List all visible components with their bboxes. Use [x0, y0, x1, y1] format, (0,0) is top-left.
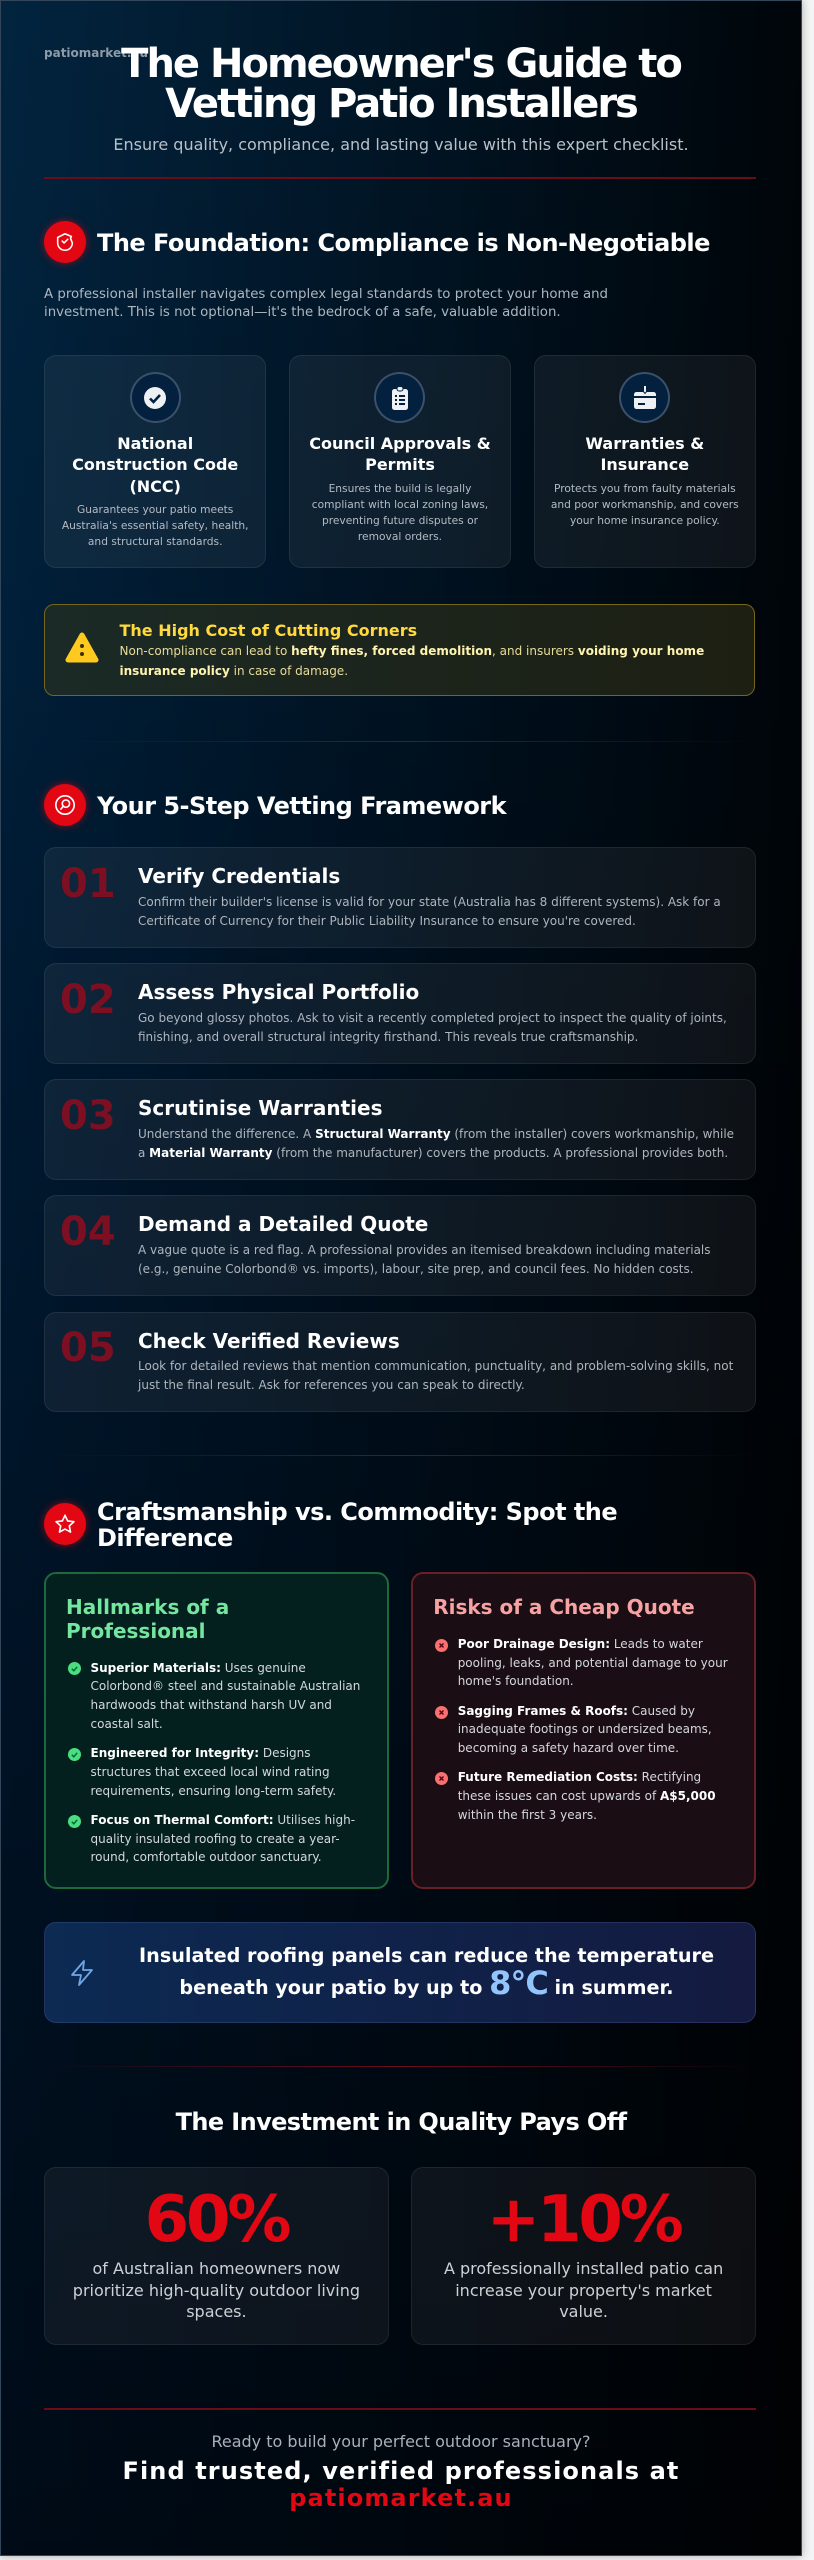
list item: Future Remediation Costs: Rectifying [458, 1770, 701, 1784]
step title: Demand a Detailed Quote [138, 1212, 428, 1236]
card text [312, 482, 488, 543]
stat text: spaces. [186, 2302, 247, 2321]
heading: craftsmanship [97, 1498, 617, 1552]
step title: Assess Physical Portfolio [138, 980, 419, 1004]
card title: (NCC) [129, 477, 181, 496]
stat text: A professionally installed patio can [444, 2259, 723, 2278]
title: Vetting Patio Installers [165, 81, 637, 127]
intro paragraph: A professional installer navigates complex legal standards to protect your home and [44, 287, 608, 302]
callout text: Non-compliance can lead to hefty fines, forced demolition, and insurers voiding your home [120, 644, 704, 658]
step text: A vague quote is a red flag. A professional provides an itemised breakdown including materials [138, 1243, 711, 1257]
step text: Look for detailed reviews that mention communication, punctuality, and problem-solving skills, not [138, 1359, 733, 1373]
card text: compliant with local zoning laws, [312, 498, 488, 511]
icon: id badge [619, 372, 670, 423]
list item: within the first 3 years. [458, 1808, 597, 1822]
list item [90, 1813, 355, 1864]
list item [90, 1746, 336, 1798]
step number: 04 [60, 1209, 116, 1255]
list item: pooling, leaks, and potential damage to your [458, 1656, 728, 1670]
list item: hardwoods that withstand harsh UV and [90, 1698, 332, 1712]
callout: insulated roofing [44, 1922, 756, 2023]
panel: risks of a cheap quote [411, 1572, 756, 1889]
step text: a Material Warranty (from the manufacturer) covers the products. A professional provides both. [138, 1146, 728, 1160]
list item: requirements, ensuring long-term safety. [90, 1784, 336, 1798]
step text [138, 1127, 734, 1160]
step number: 03 [60, 1093, 116, 1139]
step text [138, 1243, 711, 1276]
panel title: Professional [66, 1619, 206, 1643]
step 3 [44, 1079, 756, 1180]
list item: structures that exceed local wind rating [90, 1765, 330, 1779]
list item: Poor Drainage Design: Leads to water [458, 1637, 703, 1651]
intro paragraph: investment. This is not optional—it's the bedrock of a safe, valuable addition. [44, 305, 561, 320]
step text [138, 895, 721, 928]
card text: and structural standards. [88, 535, 222, 548]
card title [72, 434, 238, 496]
stat text [73, 2259, 360, 2321]
step text: Confirm their builder's license is valid for your state (Australia has 8 different systems). Ask for a [138, 895, 721, 909]
list item: Sagging Frames & Roofs: Caused by [458, 1704, 695, 1718]
card text: Guarantees your patio meets [77, 503, 233, 516]
card text: Protects you from faulty materials [554, 482, 736, 495]
subtitle: Ensure quality, compliance, and lasting value with this expert checklist. [113, 135, 689, 154]
list item: coastal salt. [90, 1717, 163, 1731]
card title: National [117, 434, 193, 453]
heading: craftsmanship: Difference [97, 1524, 233, 1552]
step text: finishing, and overall structural integrity firsthand. This reveals true craftsmanship. [138, 1030, 638, 1044]
icon: cross [435, 1772, 448, 1785]
step text: (e.g., genuine Colorbond® vs. imports), labour, site prep, and council fees. No hidden costs. [138, 1262, 694, 1276]
card text: your home insurance policy. [570, 514, 720, 527]
step number: 02 [60, 977, 116, 1023]
callout text: beneath your patio by up to 8°C in summer. [179, 1964, 674, 2002]
list item: Colorbond® steel and sustainable Australian [90, 1679, 360, 1693]
list item: these issues can cost upwards of A$5,000 [458, 1789, 716, 1803]
step number: 05 [60, 1325, 116, 1371]
panel: hallmarks of a professional [44, 1572, 389, 1889]
panel title [66, 1595, 229, 1643]
card text: removal orders. [358, 530, 442, 543]
card title: Permits [365, 455, 435, 474]
panel: council approvals [289, 355, 511, 568]
step title: Verify Credentials [138, 864, 340, 888]
step text [138, 1359, 734, 1392]
step text: Go beyond glossy photos. Ask to visit a recently completed project to inspect the quality of joints, [138, 1011, 727, 1025]
list item: round, comfortable outdoor sanctuary. [90, 1850, 322, 1864]
icon: clipboard [374, 372, 425, 423]
card title: Council Approvals & [309, 434, 491, 453]
list item [90, 1661, 360, 1731]
heading: craftsmanship: Craftsmanship vs. Commodity: Spot the [97, 1498, 617, 1526]
section icon: search [44, 784, 86, 826]
step text [138, 1011, 727, 1044]
step 1 [44, 847, 756, 948]
stat card: plus 10 percent [411, 2167, 756, 2345]
footer call to action: Find trusted, verified professionals at [122, 2457, 680, 2485]
list item: home's foundation. [458, 1674, 574, 1688]
step number: 01 [60, 861, 116, 907]
icon: check circle [130, 372, 181, 423]
stat text: increase your property's market [455, 2281, 712, 2300]
list item: becoming a safety hazard over time. [458, 1741, 679, 1755]
callout text [139, 1944, 714, 2002]
list item [458, 1704, 712, 1755]
stat text [444, 2259, 723, 2321]
card title [585, 434, 704, 474]
list item: Focus on Thermal Comfort: Utilises high- [90, 1813, 355, 1827]
stat number: +10% [487, 2183, 681, 2257]
list item: Superior Materials: Uses genuine [90, 1661, 306, 1675]
list item: Engineered for Integrity: Designs [90, 1746, 311, 1760]
footer prompt: Ready to build your perfect outdoor sanctuary? [211, 2432, 591, 2451]
list item: quality insulated roofing to create a year- [90, 1832, 340, 1846]
callout text: Insulated roofing panels can reduce the temperature [139, 1944, 714, 1967]
callout title: The High Cost of Cutting Corners [120, 621, 417, 640]
step title: Scrutinise Warranties [138, 1096, 382, 1120]
panel: warranties [534, 355, 756, 568]
list item [458, 1637, 728, 1688]
stat number: 60% [145, 2183, 288, 2257]
list item: inadequate footings or undersized beams, [458, 1722, 712, 1736]
step text: Understand the difference. A Structural Warranty (from the installer) covers workmanship, while [138, 1127, 734, 1141]
icon: warning triangle [66, 632, 98, 662]
callout text: insurance policy in case of damage. [120, 664, 348, 678]
icon: cross [435, 1639, 448, 1652]
list item [458, 1770, 716, 1822]
step 2 [44, 963, 756, 1064]
intro paragraph [44, 287, 608, 320]
panel title: Risks of a Cheap Quote [433, 1595, 695, 1619]
card text [62, 503, 249, 548]
card text: Australia's essential safety, health, [62, 519, 249, 532]
stat text: of Australian homeowners now [93, 2259, 340, 2278]
icon: check [68, 1662, 81, 1675]
step text: Certificate of Currency for their Public Liability Insurance to ensure you're covered. [138, 914, 636, 928]
stat card: 60 percent [44, 2167, 389, 2345]
icon: lightning bolt [71, 1960, 93, 1986]
section icon: star [44, 1503, 86, 1545]
stat text: prioritize high-quality outdoor living [73, 2281, 360, 2300]
step 4 [44, 1195, 756, 1296]
heading: framework: Your 5-Step Vetting Framework [97, 792, 506, 820]
card text: preventing future disputes or [322, 514, 478, 527]
step 5 [44, 1312, 756, 1412]
panel title: Hallmarks of a [66, 1595, 229, 1619]
panel: national construction code [44, 355, 266, 568]
icon: check [68, 1815, 81, 1828]
callout: high cost of cutting corners [44, 604, 755, 696]
card title: Construction Code [72, 455, 238, 474]
icon: check [68, 1748, 81, 1761]
title [121, 41, 682, 127]
card text: Ensures the build is legally [329, 482, 471, 495]
title: The Homeowner's Guide to [121, 41, 681, 87]
step text: just the final result. Ask for references you can speak to directly. [138, 1378, 525, 1392]
heading: foundation: The Foundation: Compliance is Non-Negotiable [97, 229, 710, 257]
card text: and poor workmanship, and covers [551, 498, 739, 511]
stat text: value. [559, 2302, 608, 2321]
card title: Insurance [600, 455, 689, 474]
icon: cross [435, 1706, 448, 1719]
section icon: shield check [44, 221, 86, 263]
footer call to action: patiomarket.au [289, 2484, 513, 2512]
card text [551, 482, 739, 527]
footer call to action [122, 2457, 680, 2512]
card title [309, 434, 491, 474]
step title: Check Verified Reviews [138, 1329, 400, 1353]
card title: Warranties & [585, 434, 704, 453]
heading: investment: The Investment in Quality Pays Off [176, 2108, 626, 2136]
callout text [120, 644, 704, 678]
logo: patiomarket.au [44, 46, 148, 60]
